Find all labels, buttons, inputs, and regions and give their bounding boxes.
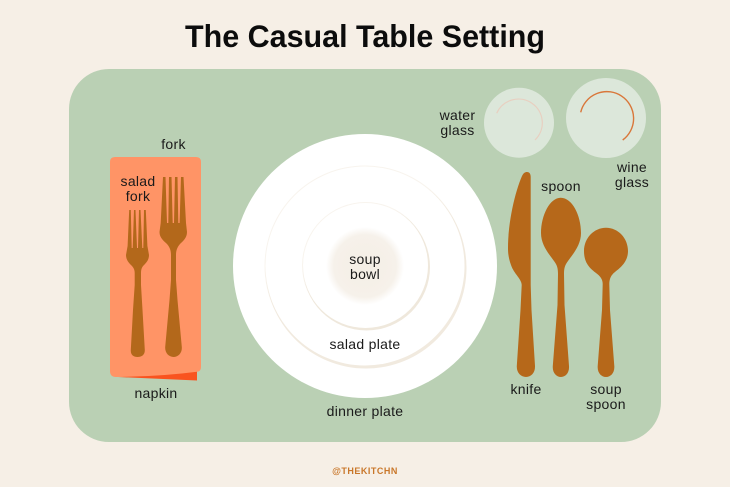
label: wine glass: wine: [617, 159, 647, 175]
label: wine glass: glass: [615, 174, 649, 190]
label: fork: fork: [161, 136, 186, 152]
soup bowl: [302, 202, 430, 330]
label: knife: knife: [510, 381, 542, 397]
label: napkin: napkin: [134, 385, 178, 401]
label: water glass: glass: [440, 122, 475, 138]
dinner plate: [233, 134, 497, 398]
icon: knife: [508, 172, 535, 377]
icon: spoon: [541, 198, 581, 377]
label: soup bowl: bowl: [350, 266, 380, 282]
label: soup bowl: soup: [349, 251, 381, 267]
credit: @THEKITCHN: @THEKITCHN: [332, 466, 398, 476]
label: salad fork: fork: [126, 188, 151, 204]
title: The Casual Table Setting: [185, 18, 545, 54]
icon: dinner fork: [160, 177, 187, 357]
icon: soup spoon: [584, 228, 628, 377]
label: salad fork: salad: [121, 173, 155, 189]
icon: wine glass: [566, 78, 646, 158]
label: soup spoon: spoon: [586, 396, 626, 412]
label: salad plate: salad plate: [329, 336, 401, 352]
salad plate: [264, 166, 466, 368]
label: soup spoon: soup: [590, 381, 622, 397]
icon: salad fork: [126, 210, 149, 357]
label: spoon: spoon: [541, 178, 581, 194]
icon: water glass: [484, 88, 554, 158]
napkin: [110, 157, 201, 380]
panel: table mat: [69, 69, 661, 442]
label: dinner plate: dinner plate: [327, 403, 403, 419]
label: water glass: water: [440, 107, 475, 123]
